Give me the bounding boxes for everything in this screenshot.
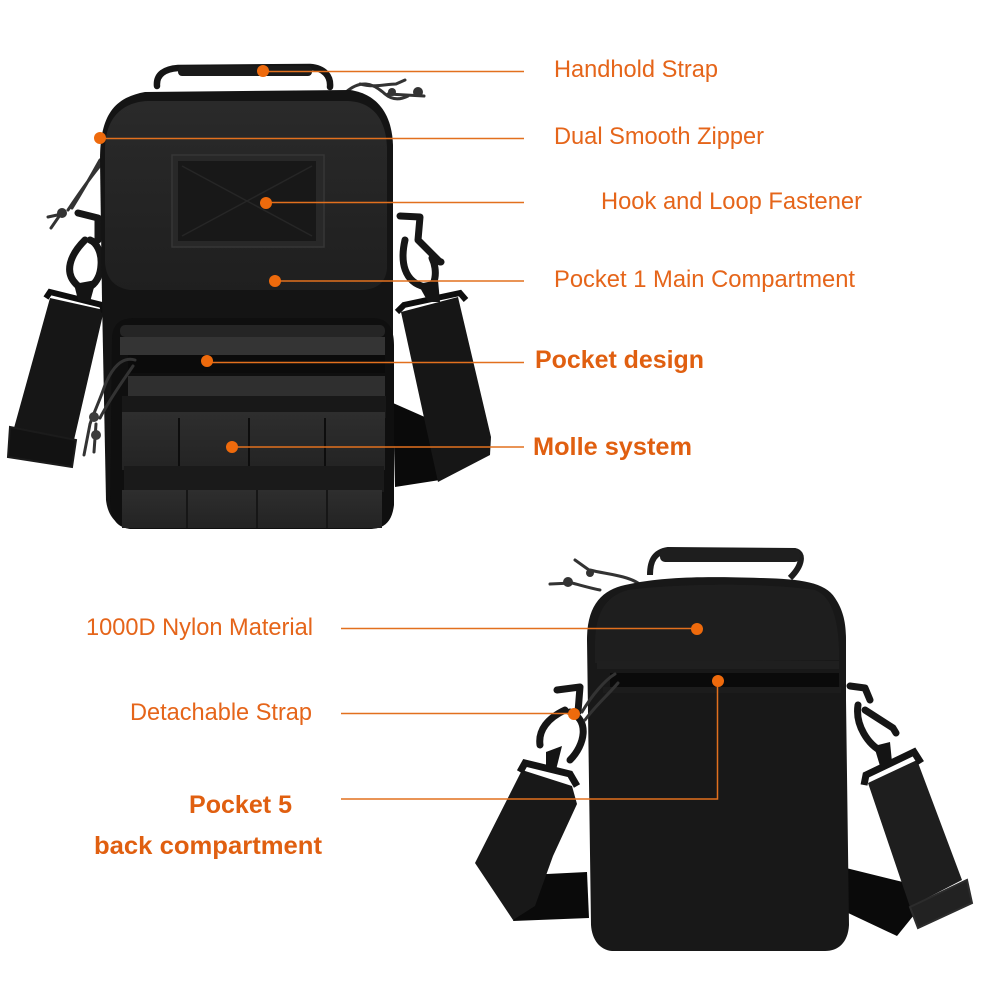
- label: Pocket 5 back compartment: Pocket 5: [189, 791, 292, 819]
- front bag: main body: [100, 90, 393, 529]
- front bag illustration: [8, 66, 491, 529]
- label: Pocket 1 Main Compartment: Pocket 1 Main Compartment: [554, 266, 855, 293]
- leader: Dual Smooth Zipper: [94, 132, 524, 144]
- front bag: rear shoulder strap: [393, 403, 440, 487]
- leader: Pocket 5 back compartment: [341, 675, 724, 799]
- label: Pocket 5 back compartment: [94, 791, 323, 860]
- back bag: rear shoulder strap, right: [846, 868, 918, 936]
- leader: Molle system: [226, 441, 524, 453]
- back bag: handle grip: [660, 549, 800, 562]
- back bag: zipper band: [597, 661, 841, 693]
- back bag: main body: [587, 577, 849, 951]
- back bag: rear shoulder strap, left: [513, 872, 589, 921]
- front bag: pocket zipper cord: [84, 359, 135, 455]
- label: Pocket 5 back compartment: back compartment: [94, 832, 323, 860]
- back bag: zipper pull: [582, 674, 618, 720]
- leader: Handhold Strap: [257, 65, 524, 77]
- front bag: upper flap: [105, 101, 387, 290]
- leader: Hook and Loop Fastener: [260, 197, 524, 209]
- front bag: right strap: [397, 293, 491, 482]
- back bag: left strap loop: [475, 763, 577, 920]
- label: Pocket design: Pocket design: [535, 346, 704, 374]
- back bag: upper panel: [595, 585, 839, 663]
- back bag illustration: [475, 549, 972, 951]
- back bag: zipper cords: [550, 560, 638, 590]
- leader: Detachable Strap: [341, 708, 580, 720]
- front bag: right swivel hook: [400, 216, 441, 302]
- front bag: left strap and buckle: [8, 292, 104, 467]
- label: Hook and Loop Fastener: Hook and Loop Fastener: [601, 188, 862, 215]
- back bag: left swivel hook: [540, 687, 583, 770]
- label: Dual Smooth Zipper: Dual Smooth Zipper: [554, 123, 764, 150]
- front bag: left swivel hook: [70, 213, 101, 302]
- front bag: lower pocket: [110, 318, 394, 529]
- front bag: top zipper cords: [346, 80, 424, 99]
- front bag: side zipper cord: [48, 160, 103, 228]
- leader: Pocket 1 Main Compartment: [269, 275, 524, 287]
- leader: Pocket design: [201, 355, 524, 367]
- label: Handhold Strap: Handhold Strap: [554, 56, 718, 83]
- back bag: handle: [650, 550, 801, 578]
- front bag: handle: [157, 66, 330, 87]
- label: Molle system: Molle system: [533, 433, 692, 461]
- leader: 1000D Nylon Material: [341, 623, 703, 635]
- label: 1000D Nylon Material: 1000D Nylon Material: [86, 614, 313, 641]
- front bag: hook and loop patch: [172, 155, 324, 247]
- back bag: right swivel hook: [850, 686, 896, 766]
- back bag: right strap and buckle: [864, 752, 972, 928]
- label: Detachable Strap: Detachable Strap: [130, 699, 312, 726]
